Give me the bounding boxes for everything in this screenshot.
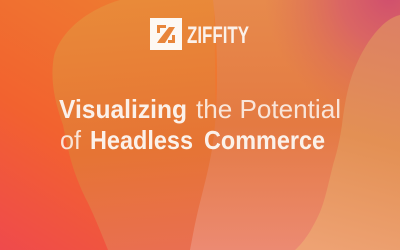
decorative blob: right [295,15,400,250]
decorative blob: left [52,0,216,250]
decorative blob: centre [190,0,400,250]
title word: of: of [60,125,82,155]
title word: Headless: Headless [90,125,193,155]
icon: Ziffity square mark [150,18,182,50]
pink glow: top right [217,0,400,130]
title words: the Potential: the Potential [196,94,341,124]
title [59,94,341,155]
logo [150,18,249,50]
wordmark: ZIFFITY [187,22,249,49]
title word: Commerce: Commerce [204,125,325,155]
title word: Visualizing: Visualizing [59,94,187,124]
